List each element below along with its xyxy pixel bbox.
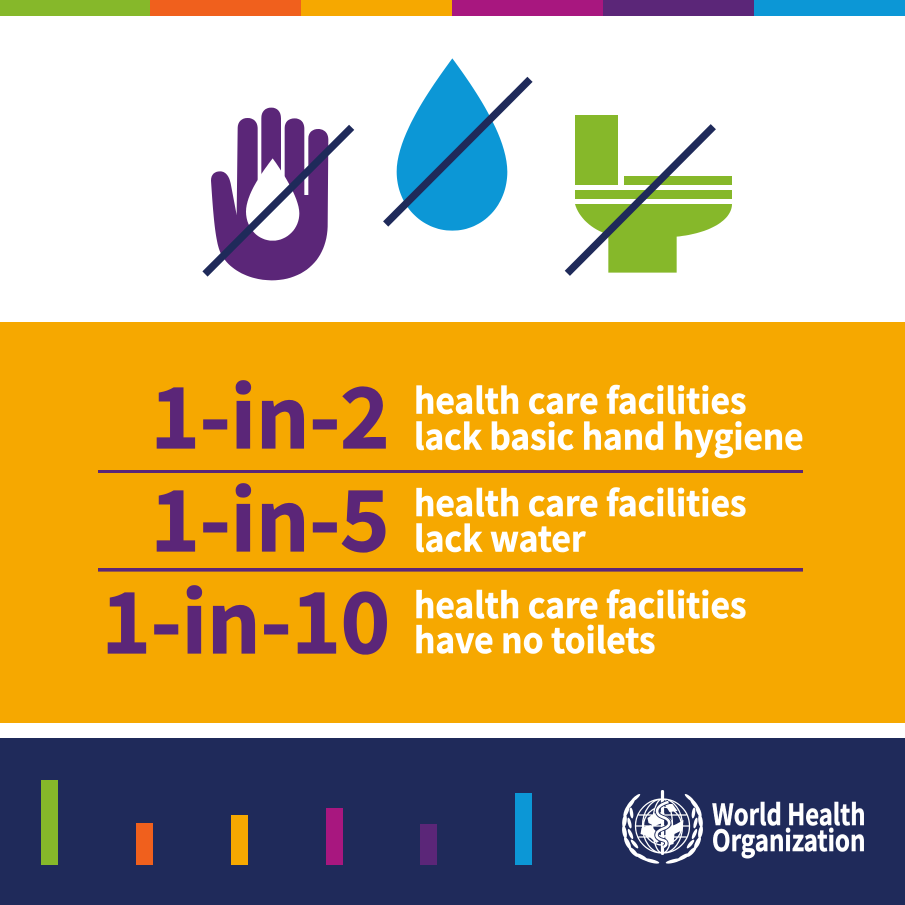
statistic: 1-in-10: health care facilities [414,578,746,629]
statistic: 1-in-2 [150,352,804,472]
footer colour bars [41,780,532,865]
statistic: 1-in-10 [102,557,746,677]
footer band [0,738,905,905]
statistic: 1-in-5: lack water [414,512,586,562]
WHO wordmark: World Health [712,792,866,834]
statistic: 1-in-5 [150,455,746,575]
top colour stripe [0,0,905,16]
icon: WHO emblem [621,790,704,865]
statistic: 1-in-2: health care facilities [414,374,746,424]
panel: statistics [0,322,905,723]
statistic: 1-in-5: health care facilities [414,476,746,527]
statistic: 1-in-2: 1-in-2 [150,352,390,472]
statistic: 1-in-10: 1-in-10 [102,557,390,677]
statistic: 1-in-2: lack basic hand hygiene [414,410,804,460]
WHO wordmark [712,792,866,860]
icon: crossed-out water drop [386,58,530,231]
statistic: 1-in-5: 1-in-5 [150,455,390,575]
WHO wordmark: Organization [712,818,866,860]
icon: crossed-out hand with water drop [205,108,352,280]
icon: crossed-out toilet [567,115,732,273]
statistic: 1-in-10: have no toilets [414,613,656,664]
